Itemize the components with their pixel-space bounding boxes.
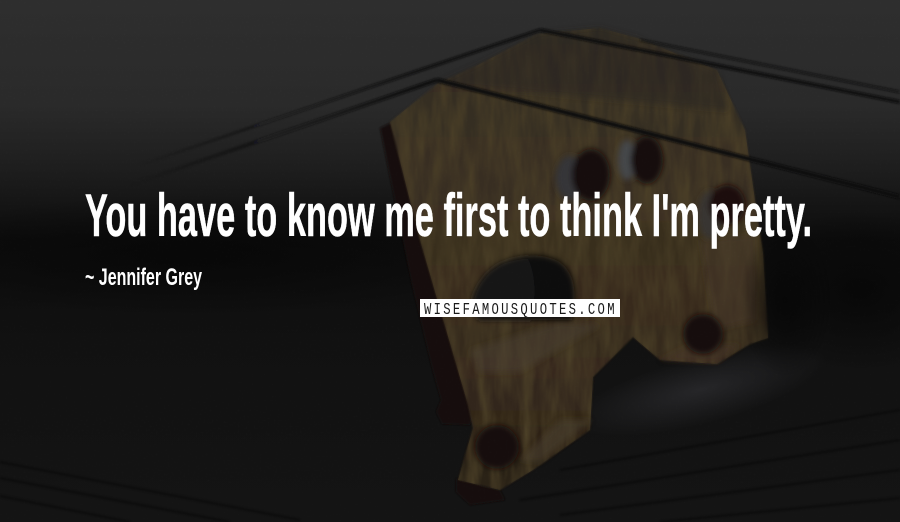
wood mottling xyxy=(380,20,780,500)
watermark: WISEFAMOUSQUOTES.COM xyxy=(424,301,617,320)
attribution: ~ Jennifer Grey xyxy=(85,264,202,291)
bridge dark side xyxy=(380,122,478,425)
bridge wood xyxy=(390,28,768,490)
background shading xyxy=(0,195,900,454)
wood highlight ledges xyxy=(470,235,755,462)
violin strings xyxy=(130,30,900,197)
fingerboard lines xyxy=(0,410,900,522)
violin bridge xyxy=(380,27,768,505)
dark shadow right of bridge xyxy=(740,225,830,375)
dark upper back face xyxy=(437,28,728,110)
bridge shadow foot xyxy=(456,478,505,505)
bridge holes xyxy=(472,136,745,469)
